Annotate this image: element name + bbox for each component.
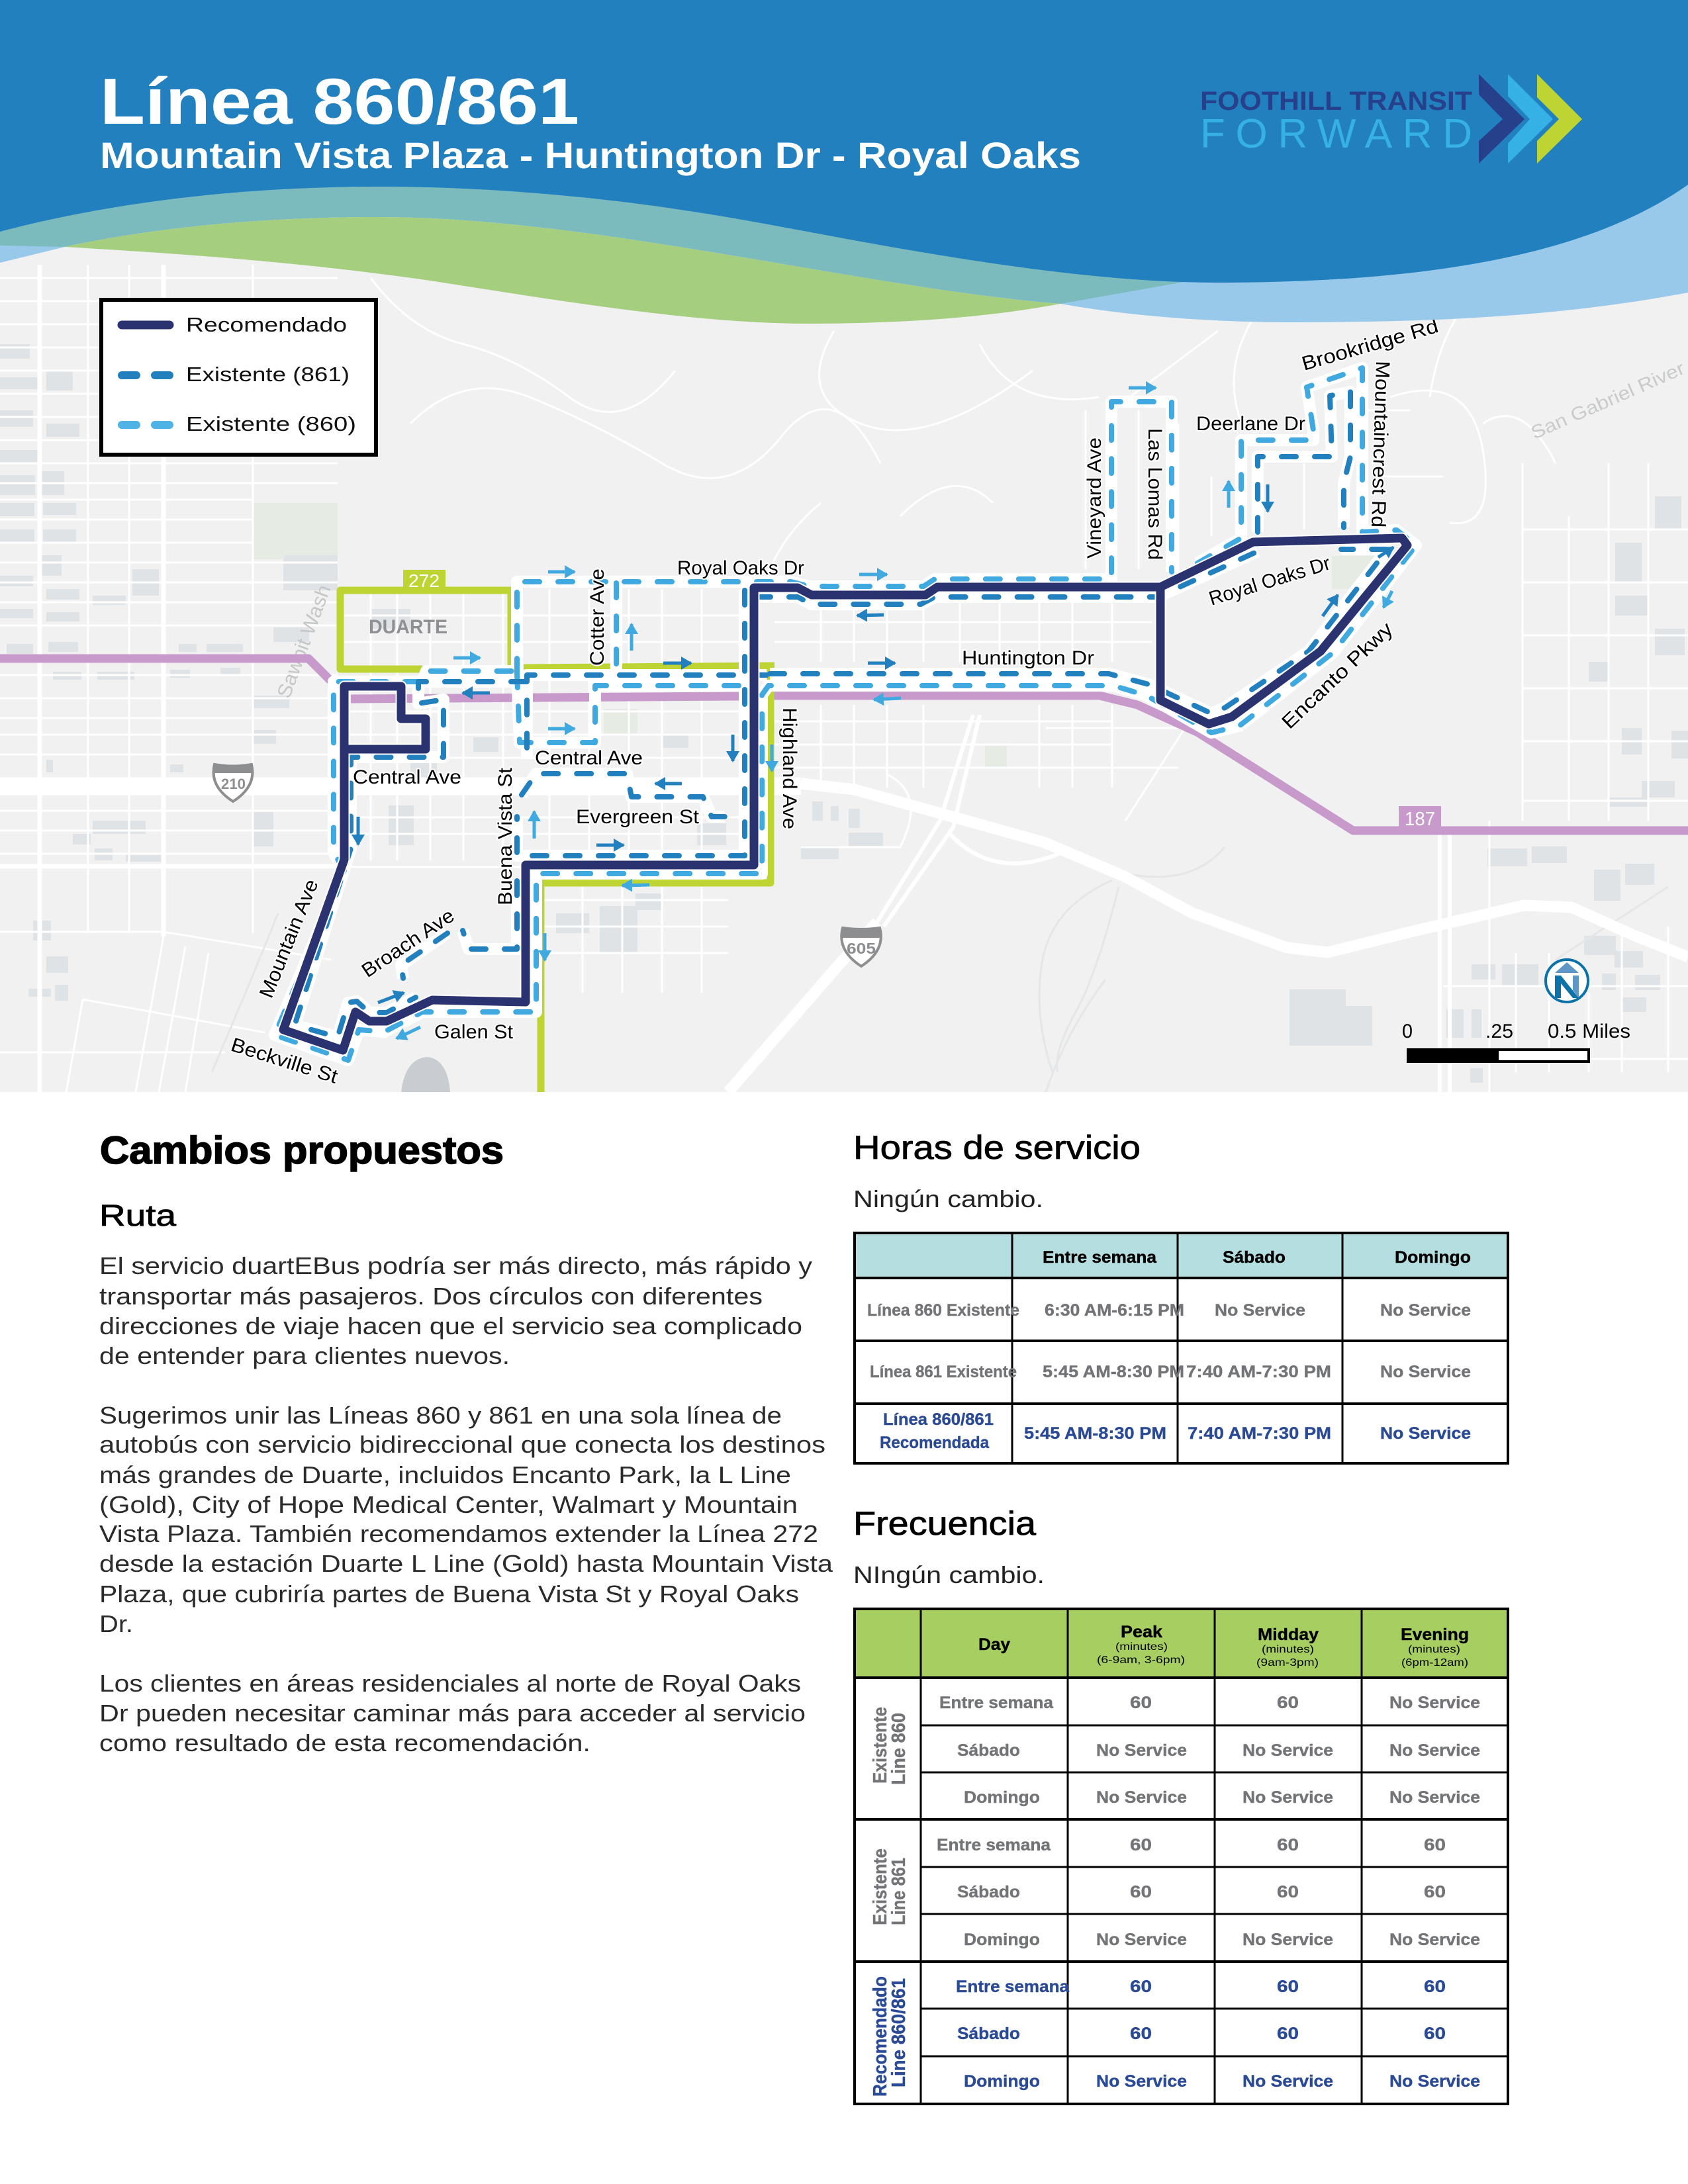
- existing line 861 rows: 60: [1424, 1836, 1446, 1854]
- logo: Foothill Transit Forward: [1200, 74, 1582, 163]
- rotated row group labels: Line 861: [888, 1858, 910, 1925]
- existing line 860 rows: Entre semana: [939, 1694, 1054, 1712]
- route: recommended 860/861 solid: [283, 538, 1407, 1050]
- table header labels: [978, 1623, 1469, 1668]
- rotated row group labels: Existente: [870, 1707, 891, 1784]
- route 187 purple line: 187: [1405, 809, 1435, 830]
- legend: [101, 300, 376, 455]
- existing line 861 rows: Entre semana: [937, 1836, 1051, 1854]
- scale bar: 0: [1402, 1021, 1413, 1042]
- text block: route description: autobús con servicio bidireccional que conecta los destinos: [99, 1431, 825, 1458]
- table: service hours: Entre semana: [1043, 1248, 1157, 1267]
- icon: interstate 605 shield: [841, 928, 881, 966]
- logo: Foothill Transit Forward: FOOTHILL TRANSIT: [1200, 87, 1472, 116]
- text block: route description: desde la estación Duarte L Line (Gold) hasta Mountain Vista: [99, 1550, 833, 1577]
- existing line 861 rows: 60: [1277, 1883, 1299, 1901]
- recommended line 860/861 rows: Sábado: [957, 2025, 1020, 2043]
- table header labels: (6pm-12am): [1401, 1657, 1468, 1668]
- street labels: Vineyard Ave: [1084, 437, 1105, 559]
- table header labels: Evening: [1401, 1625, 1469, 1644]
- legend: Existente (860): [186, 412, 356, 435]
- text block: route description: Los clientes en áreas residenciales al norte de Royal Oaks: [99, 1670, 801, 1697]
- street labels: [228, 315, 1441, 1088]
- existing line 860 rows: Domingo: [964, 1788, 1040, 1807]
- table header labels: (minutes): [1408, 1644, 1460, 1655]
- route: existing 860 dashed: [275, 368, 1416, 1060]
- table: service hours: Sábado: [1223, 1248, 1286, 1267]
- logo: Foothill Transit Forward: FORWARD: [1200, 111, 1472, 157]
- rotated row group labels: Existente: [870, 1848, 891, 1925]
- table: service hours: No Service: [1215, 1301, 1305, 1320]
- table header labels: (6-9am, 3-6pm): [1097, 1655, 1185, 1666]
- rotated row group labels: [870, 1707, 910, 2097]
- icon: north arrow: [1546, 960, 1588, 1002]
- icon: interstate 605 shield: 605: [847, 940, 876, 957]
- text: river and wash labels: Sawpit Wash: [273, 582, 336, 701]
- table header labels: Peak: [1121, 1623, 1162, 1641]
- text block: route description: (Gold), City of Hope Medical Center, Walmart y Mountain: [99, 1491, 798, 1518]
- legend: Recomendado: [186, 313, 347, 336]
- recommended line 860/861 rows: Domingo: [964, 2072, 1040, 2091]
- existing line 861 rows: No Service: [1243, 1931, 1333, 1949]
- existing line 860 rows: 60: [1130, 1694, 1152, 1712]
- heading: Ruta: Ruta: [99, 1199, 177, 1232]
- street labels: Encanto Pkwy: [1278, 618, 1397, 733]
- text block: route description: Dr pueden necesitar caminar más para acceder al servicio: [99, 1700, 806, 1727]
- table: service hours: No Service: [1380, 1301, 1471, 1320]
- text block: route description: Sugerimos unir las Líneas 860 y 861 en una sola línea de: [99, 1402, 782, 1429]
- recommended line 860/861 rows: 60: [1277, 2025, 1299, 2043]
- text block: route description: Plaza, que cubriría partes de Buena Vista St y Royal Oaks: [99, 1580, 799, 1608]
- street labels: Galen St: [434, 1021, 514, 1043]
- existing line 861 rows: [937, 1836, 1480, 1949]
- existing line 861 rows: 60: [1277, 1836, 1299, 1854]
- recommended line 860/861 rows: 60: [1130, 1978, 1152, 1996]
- header waves: [0, 0, 1688, 324]
- icon: interstate 210 shield: [213, 764, 253, 801]
- table: service hours: No Service: [1380, 1363, 1471, 1381]
- existing line 861 rows: No Service: [1096, 1931, 1187, 1949]
- route: existing 861 dashed: [296, 392, 1387, 1037]
- existing line 860 rows: 60: [1277, 1694, 1299, 1712]
- street labels: Central Ave: [535, 747, 643, 769]
- street labels: Beckville St: [228, 1034, 341, 1088]
- route 272 green line: 272: [408, 570, 440, 591]
- text block: route description: de entender para clientes nuevos.: [99, 1342, 510, 1369]
- table: service hours: 6:30 AM-6:15 PM: [1045, 1301, 1184, 1320]
- table: service hours: Línea 860 Existente: [867, 1301, 1019, 1320]
- text block: route description: transportar más pasajeros. Dos círculos con diferentes: [99, 1283, 763, 1310]
- scale bar: .25: [1485, 1021, 1513, 1042]
- heading: Frecuencia: Frecuencia: [853, 1505, 1036, 1542]
- street labels: Central Ave: [353, 766, 461, 788]
- table: service hours: 7:40 AM-7:30 PM: [1186, 1363, 1331, 1381]
- existing line 860 rows: Sábado: [957, 1741, 1020, 1760]
- recommended line 860/861 rows: No Service: [1243, 2072, 1333, 2091]
- text block: route description: como resultado de esta recomendación.: [99, 1729, 590, 1756]
- existing line 860 rows: No Service: [1243, 1741, 1333, 1760]
- existing line 860 rows: No Service: [1096, 1788, 1187, 1807]
- recommended line 860/861 rows: 60: [1130, 2025, 1152, 2043]
- street labels: Mountain Ave: [256, 876, 323, 1001]
- table header labels: (9am-3pm): [1256, 1657, 1319, 1668]
- existing line 861 rows: 60: [1130, 1883, 1152, 1901]
- text block: route description: Dr.: [99, 1610, 133, 1637]
- street labels: Evergreen St: [576, 806, 700, 828]
- table: service hours: 7:40 AM-7:30 PM: [1188, 1424, 1331, 1443]
- heading: Cambios propuestos: Cambios propuestos: [100, 1129, 504, 1172]
- recommended line 860/861 rows: Entre semana: [956, 1978, 1070, 1996]
- text: Duarte city label: DUARTE: [369, 616, 447, 638]
- street labels: Royal Oaks Dr: [677, 557, 804, 579]
- table: service hours: 5:45 AM-8:30 PM: [1024, 1424, 1166, 1443]
- existing line 860 rows: No Service: [1096, 1741, 1187, 1760]
- table: service hours: Línea 861 Existente: [870, 1363, 1017, 1381]
- street labels: Deerlane Dr: [1196, 413, 1305, 435]
- table: service hours: No Service: [1380, 1424, 1471, 1443]
- recommended line 860/861 rows: 60: [1424, 2025, 1446, 2043]
- rotated row group labels: Recomendado: [870, 1976, 891, 2097]
- street labels: Buena Vista St: [494, 767, 516, 905]
- street labels: Highland Ave: [778, 707, 800, 829]
- existing line 860 rows: No Service: [1389, 1741, 1480, 1760]
- recommended line 860/861 rows: 60: [1424, 1978, 1446, 1996]
- street labels: Huntington Dr: [962, 647, 1094, 669]
- heading: Horas de servicio: Horas de servicio: [853, 1129, 1141, 1166]
- text block: route description: direcciones de viaje hacen que el servicio sea complicado: [99, 1312, 802, 1340]
- existing line 861 rows: 60: [1424, 1883, 1446, 1901]
- existing line 860 rows: No Service: [1243, 1788, 1333, 1807]
- existing line 860 rows: No Service: [1389, 1788, 1480, 1807]
- existing line 860 rows: [939, 1694, 1480, 1807]
- table header labels: (minutes): [1262, 1644, 1314, 1655]
- recommended line 860/861 rows: No Service: [1096, 2072, 1187, 2091]
- route 272 green line: [340, 570, 774, 1092]
- table: service hours: Recomendada: [880, 1433, 990, 1452]
- arrows: direction of travel 860: [397, 388, 1392, 1038]
- table header labels: Midday: [1258, 1625, 1319, 1644]
- street labels: Las Lomas Rd: [1144, 428, 1166, 560]
- street labels: Brookridge Rd: [1299, 315, 1441, 375]
- rotated row group labels: Line 860: [888, 1713, 910, 1785]
- text: river and wash labels: San Gabriel River: [1528, 358, 1687, 443]
- text: river and wash labels: [273, 358, 1687, 701]
- existing line 861 rows: Sábado: [957, 1883, 1020, 1901]
- table: service hours: Domingo: [1395, 1248, 1471, 1267]
- street labels: Broach Ave: [358, 905, 459, 982]
- text block: route description: El servicio duartEBus podría ser más directo, más rápido y: [99, 1252, 812, 1279]
- table header labels: Day: [978, 1635, 1010, 1654]
- scale bar: [1402, 1021, 1630, 1063]
- scale bar: 0.5 Miles: [1548, 1021, 1630, 1042]
- table: frequency: [855, 1609, 1508, 2104]
- existing line 861 rows: No Service: [1389, 1931, 1480, 1949]
- route 187 purple line: [0, 659, 1688, 831]
- legend: Existente (861): [186, 363, 350, 386]
- recommended line 860/861 rows: No Service: [1389, 2072, 1480, 2091]
- street labels: Mountaincrest Rd: [1367, 361, 1393, 528]
- text block: route description: [99, 1252, 833, 1756]
- recommended line 860/861 rows: 60: [1277, 1978, 1299, 1996]
- street labels: Cotter Ave: [586, 569, 608, 666]
- rotated row group labels: Line 860/861: [888, 1978, 910, 2087]
- text block: route description: más grandes de Duarte, incluidos Encanto Park, la L Line: [99, 1461, 791, 1488]
- street labels: Royal Oaks Dr: [1206, 553, 1333, 610]
- text: Ningún cambio (frequency): NIngún cambio.: [853, 1561, 1045, 1588]
- subtitle: Mountain Vista Plaza - Huntington Dr - Royal Oaks: [100, 134, 1081, 176]
- existing line 861 rows: Domingo: [964, 1931, 1040, 1949]
- arrows: direction of travel 861: [358, 484, 1393, 1003]
- recommended line 860/861 rows: [956, 1978, 1480, 2091]
- panel: route map: [0, 225, 1688, 1092]
- table header labels: (minutes): [1115, 1641, 1168, 1653]
- existing line 861 rows: 60: [1130, 1836, 1152, 1854]
- existing line 860 rows: No Service: [1389, 1694, 1480, 1712]
- title: Línea 860/861: [100, 65, 579, 138]
- table: service hours: Línea 860/861: [883, 1410, 994, 1429]
- icon: interstate 210 shield: 210: [221, 776, 246, 792]
- text: Ningún cambio (hours): Ningún cambio.: [853, 1185, 1043, 1212]
- route casing: [275, 368, 1416, 1060]
- table: service hours: [855, 1233, 1508, 1463]
- text block: route description: Vista Plaza. También recomendamos extender la Línea 272: [99, 1520, 818, 1547]
- table: service hours: 5:45 AM-8:30 PM: [1043, 1363, 1184, 1381]
